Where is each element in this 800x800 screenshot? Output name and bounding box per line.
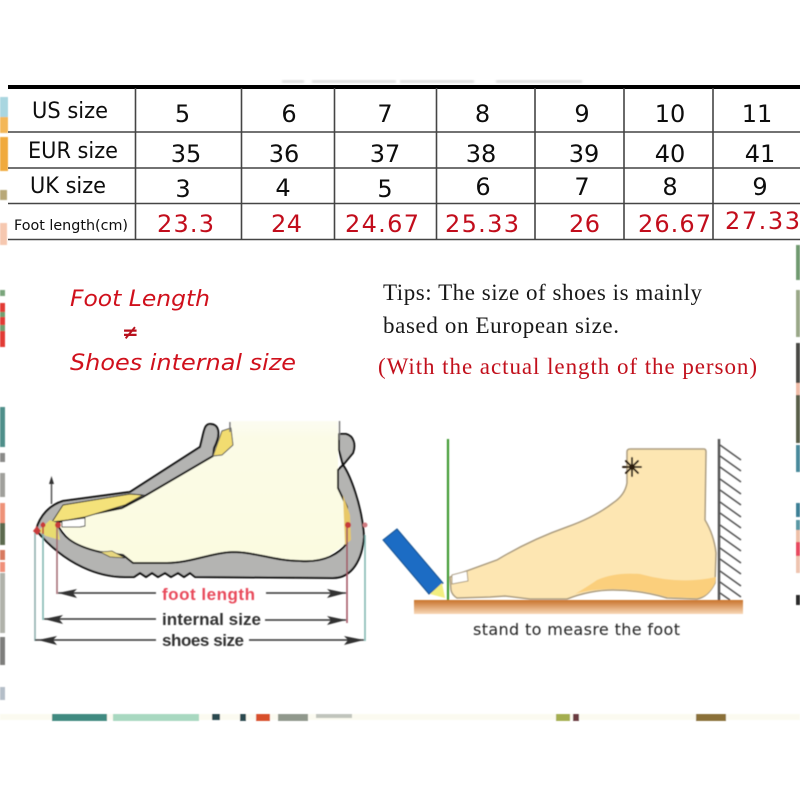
row: foot length: 25.33 [445,210,519,238]
yellow lining at toe [52,494,143,522]
shoes size dimension: shoes size [162,631,244,650]
caption: stand to measre the foot [473,620,680,639]
row: US size: 5 [175,100,190,128]
size table [8,85,800,240]
row: US size: US size [32,99,108,124]
row: EUR size: 39 [569,140,599,168]
table grid [8,85,800,240]
row: foot length: Foot length(cm) [14,218,128,234]
foot [450,449,716,599]
row: US size: 7 [377,100,393,128]
row: US size [32,99,772,128]
foot length dimension [58,585,346,604]
row: UK size: 6 [475,173,491,201]
shoes size dimension [35,631,364,650]
note: foot length vs internal size: Shoes internal size [70,350,296,376]
row: EUR size: 37 [370,140,400,168]
arrow tip above toe [49,476,54,484]
row: foot length: 26.67 [638,210,711,238]
floor [414,600,743,614]
standing foot measurement diagram [383,439,743,639]
note: foot length vs internal size [70,286,296,376]
note: foot length vs internal size: Foot Length [70,286,210,312]
shoe cross-section diagram [33,421,368,650]
row: EUR size: 41 [745,140,775,168]
foot inside shoe [57,421,347,563]
row: UK size: 9 [752,173,768,201]
green guide line [447,439,449,600]
tips text [378,280,757,379]
toenail [452,571,468,584]
tips text: Tips: The size of shoes is mainly [383,280,702,305]
row: UK size: UK size [30,174,106,199]
row: US size: 11 [742,100,772,128]
arch shading [575,574,716,598]
white toe cap [62,518,85,527]
decorative left edge pattern [0,97,8,700]
row: EUR size: 35 [171,140,201,168]
row: UK size [30,173,768,203]
row: EUR size: 36 [269,140,299,168]
row: UK size: 8 [662,173,678,201]
yellow toe and heel pads [38,520,60,540]
row: US size: 8 [475,100,490,128]
tips text: based on European size. [383,313,619,338]
row: UK size: 3 [175,175,191,203]
foot length dimension: foot length [162,585,255,604]
decorative bottom edge pattern [0,714,800,721]
row: foot length: 27.33 [725,207,800,235]
row: UK size: 7 [574,173,590,201]
vertical reference lines [35,421,365,641]
internal size dimension: internal size [162,610,261,629]
row: EUR size: EUR size [28,139,118,164]
row: foot length: 26 [569,210,600,238]
decorative right edge pattern [796,245,800,605]
wall with hatching [719,439,741,600]
shoe sole and upper [36,424,364,578]
note: foot length vs internal size: ≠ [122,320,139,344]
row: EUR size: 40 [655,140,685,168]
row: foot length [14,207,800,238]
row: US size: 6 [281,100,297,128]
row: EUR size [28,139,775,168]
row: US size: 9 [574,100,590,128]
row: UK size: 5 [377,175,393,203]
row: US size: 10 [655,100,685,128]
row: UK size: 4 [275,174,291,202]
faint clipped chart heading [282,80,582,83]
row: EUR size: 38 [466,140,496,168]
pencil [383,529,445,598]
yellow lining at ankle [213,428,233,456]
row: foot length: 23.3 [157,210,214,238]
red measuring points [33,522,368,535]
row: foot length: 24 [271,210,302,238]
row: foot length: 24.67 [345,210,419,238]
tips text: (With the actual length of the person) [378,354,757,379]
ankle mark [623,458,641,476]
internal size dimension [44,610,346,629]
